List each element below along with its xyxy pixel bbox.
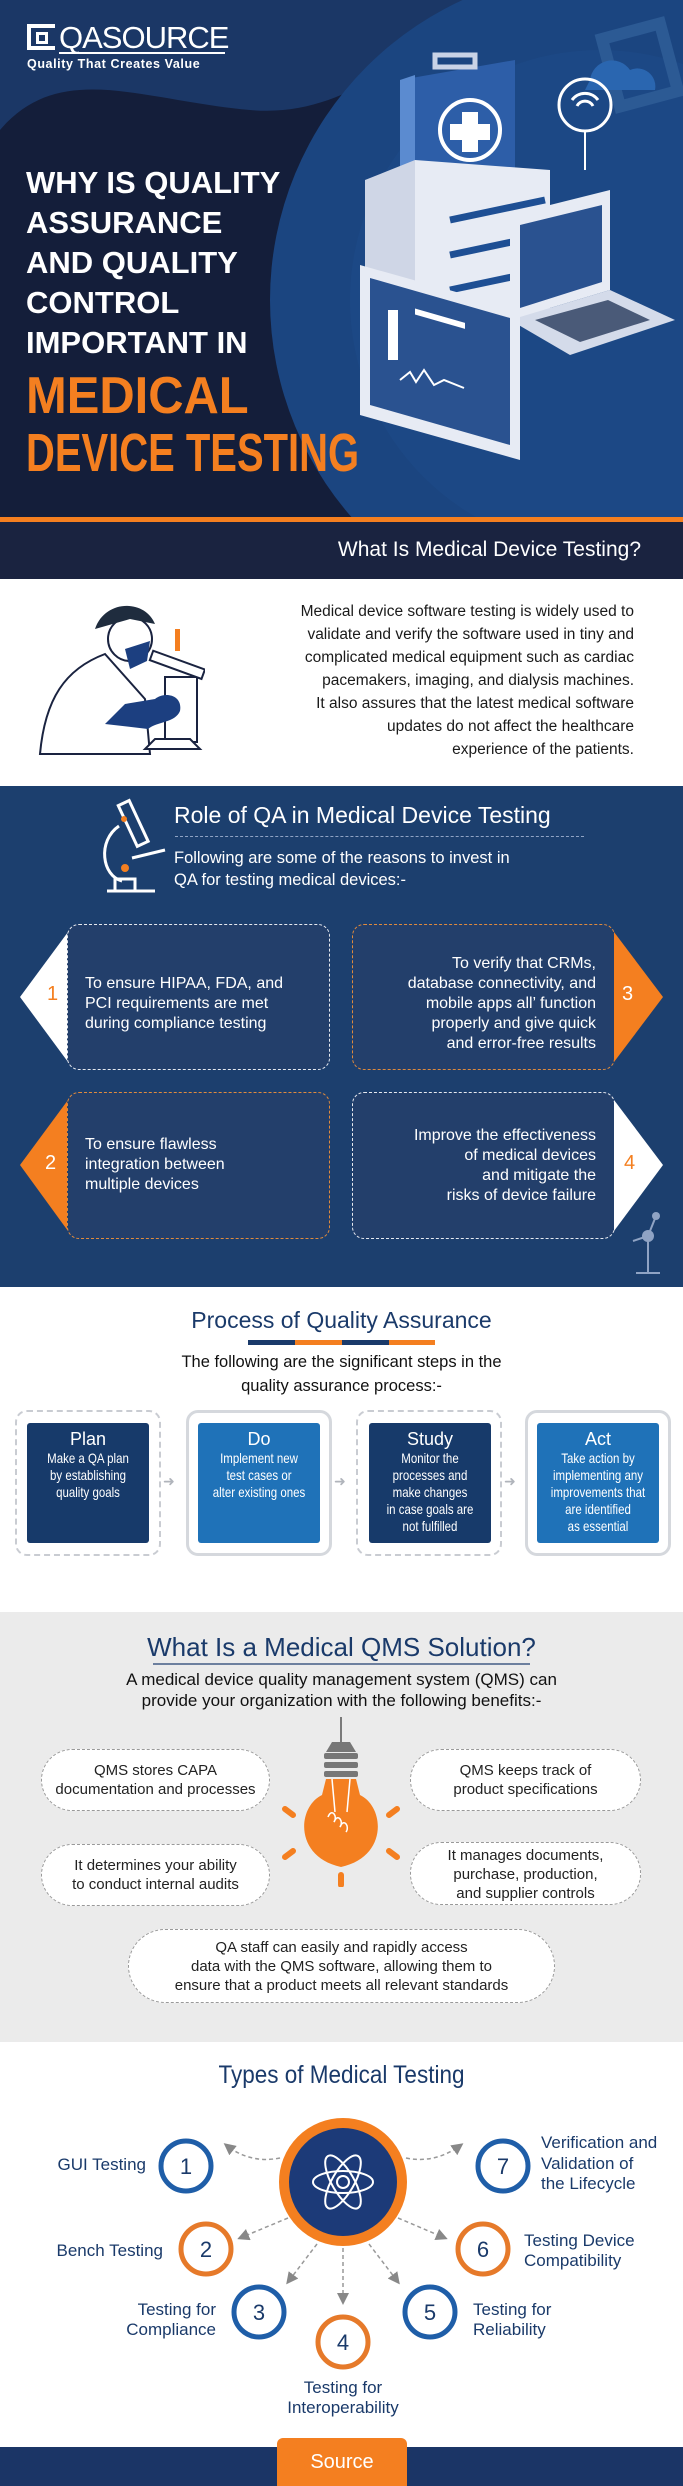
pill: QA staff access: data with the QMS software, allowing them to: [191, 1958, 492, 1975]
title: MEDICAL: [26, 367, 249, 425]
text: description: pacemakers, imaging, and dialysis machines.: [322, 672, 634, 689]
pill: audits: [41, 1844, 270, 1906]
diagram: 6: [477, 2237, 489, 2262]
step: act: Take action by: [561, 1450, 635, 1466]
card 4: 4: [624, 1152, 635, 1174]
case: [400, 60, 515, 210]
panel: what is medical device testing: [0, 579, 683, 786]
card 4: and mitigate the: [482, 1167, 596, 1184]
pill: QA staff access: QA staff can easily and rapidly access: [215, 1939, 468, 1956]
step: plan: by establishing: [50, 1467, 126, 1483]
heading: What Is a Medical QMS Solution?: [147, 1632, 536, 1662]
title: ASSURANCE: [26, 205, 222, 240]
central atom circle: [284, 2123, 402, 2241]
diagram: Testing Device: [524, 2231, 635, 2250]
arrow: ➜: [504, 1473, 516, 1489]
pill: specifications: [410, 1749, 641, 1811]
text: description: complicated medical equipment such as cardiac: [305, 649, 634, 666]
step: do: Implement new: [220, 1450, 298, 1466]
card 2: [20, 1092, 330, 1239]
server: [365, 160, 415, 310]
text: description: Medical device software testing is widely used to: [301, 603, 634, 620]
step: study: processes and: [393, 1467, 467, 1483]
card 4: [352, 1092, 663, 1239]
section heading: what is medical device testing: [0, 522, 683, 579]
step: plan: [15, 1410, 161, 1556]
subtext: quality assurance process:-: [241, 1377, 442, 1395]
subtext: [181, 1353, 502, 1395]
step: plan: quality goals: [56, 1484, 120, 1500]
subtext: [174, 849, 510, 889]
diagram: GUI Testing: [57, 2155, 146, 2174]
source button: [277, 2438, 407, 2486]
diagram: the Lifecycle: [541, 2174, 636, 2193]
step: act: as essential: [568, 1518, 628, 1534]
card 3: [352, 924, 663, 1070]
card 1: [20, 924, 330, 1070]
pill: audits: to conduct internal audits: [72, 1876, 239, 1893]
card 2: multiple devices: [85, 1176, 199, 1193]
panel: process of quality assurance: [0, 1287, 683, 1612]
card 2: To ensure flawless: [85, 1136, 217, 1153]
icon: light bulb: [282, 1717, 400, 1887]
step: do: test cases or: [226, 1467, 292, 1483]
pill: CAPA: documentation and processes: [55, 1781, 256, 1798]
step: study: make changes: [393, 1484, 467, 1500]
subtext: The following are the significant steps in the: [181, 1353, 502, 1371]
subtext: A medical device quality management system (QMS) can: [126, 1670, 557, 1689]
logo: QASOURCE: [59, 20, 228, 55]
hero section: [0, 0, 683, 520]
diagram: Validation of: [541, 2154, 634, 2173]
diagram: [57, 2118, 657, 2417]
pill: audits: It determines your ability: [74, 1857, 237, 1874]
card 1: To ensure HIPAA, FDA, and: [85, 975, 283, 992]
card 1: during compliance testing: [85, 1015, 266, 1032]
diagram: Testing for: [138, 2300, 216, 2319]
step: act: Act: [585, 1429, 611, 1449]
card 1: 1: [47, 983, 58, 1005]
pill: specifications: product specifications: [453, 1781, 598, 1798]
icon: microscope: [103, 798, 166, 892]
title: CONTROL: [26, 285, 179, 320]
icon: molecule: [632, 1212, 660, 1274]
card 3: mobile apps all’ function: [426, 995, 596, 1012]
step: do: alter existing ones: [213, 1484, 305, 1500]
card 3: and error-free results: [447, 1035, 596, 1052]
footer: [0, 2447, 683, 2486]
arrow: ➜: [334, 1473, 346, 1489]
pill: controls: purchase, production,: [453, 1866, 598, 1883]
step: plan: Plan: [70, 1429, 106, 1449]
monitor: [360, 265, 520, 460]
diagram: Reliability: [473, 2320, 546, 2339]
illustration: medical devices: [360, 52, 675, 460]
step: study: Monitor the: [401, 1450, 459, 1466]
step: act: [525, 1410, 671, 1556]
text: description: validate and verify the software used in tiny and: [307, 626, 634, 643]
diagram: Testing for: [473, 2300, 552, 2319]
logo: [27, 20, 228, 71]
card 2: integration between: [85, 1156, 225, 1173]
diagram: 5: [424, 2300, 436, 2325]
text: description: experience of the patients.: [452, 741, 634, 758]
pill: QA staff access: [128, 1929, 555, 2003]
logo: Quality That Creates Value: [27, 57, 200, 71]
title: DEVICE TESTING: [26, 423, 359, 483]
pill: CAPA: QMS stores CAPA: [94, 1762, 217, 1779]
step: study: in case goals are: [387, 1501, 473, 1517]
text: description: updates do not affect the healthcare: [387, 718, 634, 735]
pill: QA staff access: ensure that a product meets all relevant standards: [175, 1977, 508, 1994]
diagram: Verification and: [541, 2133, 657, 2152]
step: plan: Make a QA plan: [47, 1450, 129, 1466]
step: do: Do: [247, 1429, 270, 1449]
text: description: [301, 603, 634, 758]
diagram: Testing for: [304, 2378, 383, 2397]
diagram: Interoperability: [287, 2398, 399, 2417]
panel: role of QA: [0, 786, 683, 1287]
orange divider: [0, 517, 683, 522]
step: act: are identified: [565, 1501, 631, 1517]
title: [26, 165, 359, 483]
diagram: 4: [337, 2330, 349, 2355]
subtext: [126, 1670, 557, 1710]
card 4: risks of device failure: [447, 1187, 596, 1204]
step: study: not fulfilled: [403, 1518, 457, 1534]
diagram: Bench Testing: [57, 2241, 163, 2260]
card 3: database connectivity, and: [408, 975, 596, 992]
diagram: 3: [253, 2300, 265, 2325]
subtext: QA for testing medical devices:-: [174, 871, 406, 889]
section heading: what is medical device testing: What Is Medical Device Testing?: [338, 538, 641, 561]
heading: Role of QA in Medical Device Testing: [174, 802, 551, 828]
card 3: To verify that CRMs,: [452, 955, 596, 972]
card 3: properly and give quick: [431, 1015, 596, 1032]
diagram: 1: [180, 2154, 192, 2179]
pill: CAPA: [41, 1749, 270, 1811]
text: description: It also assures that the latest medical software: [316, 695, 634, 712]
arrow: ➜: [163, 1473, 175, 1489]
pill: controls: [410, 1842, 641, 1905]
pill: controls: It manages documents,: [448, 1847, 603, 1864]
heading: Types of Medical Testing: [219, 2061, 464, 2089]
step: act: improvements that: [551, 1484, 645, 1500]
wifi: [559, 79, 611, 131]
title: WHY IS QUALITY: [26, 165, 280, 200]
diagram: 7: [497, 2154, 509, 2179]
card 3: 3: [622, 983, 633, 1005]
diagram: 2: [200, 2237, 212, 2262]
source button: Source: [310, 2451, 374, 2473]
pill: specifications: QMS keeps track of: [460, 1762, 591, 1779]
title: IMPORTANT IN: [26, 325, 248, 360]
diagram: Compatibility: [524, 2251, 622, 2270]
subtext: Following are some of the reasons to invest in: [174, 849, 510, 867]
pill: controls: and supplier controls: [456, 1885, 595, 1902]
panel: medical QMS solution: [0, 1612, 683, 2042]
step: study: [356, 1410, 502, 1556]
step: do: [186, 1410, 332, 1556]
card 2: 2: [45, 1152, 56, 1174]
title: AND QUALITY: [26, 245, 238, 280]
icon: scientist with microscope: [38, 606, 205, 755]
laptop: [510, 190, 610, 320]
panel: types of medical testing: [0, 2042, 683, 2447]
step: act: implementing any: [553, 1467, 643, 1483]
heading: Process of Quality Assurance: [191, 1307, 492, 1333]
step: study: Study: [407, 1429, 453, 1449]
card 4: of medical devices: [464, 1147, 596, 1164]
card 1: PCI requirements are met: [85, 995, 268, 1012]
diagram: Compliance: [126, 2320, 216, 2339]
card 4: Improve the effectiveness: [414, 1127, 596, 1144]
subtext: provide your organization with the following benefits:-: [142, 1691, 541, 1710]
